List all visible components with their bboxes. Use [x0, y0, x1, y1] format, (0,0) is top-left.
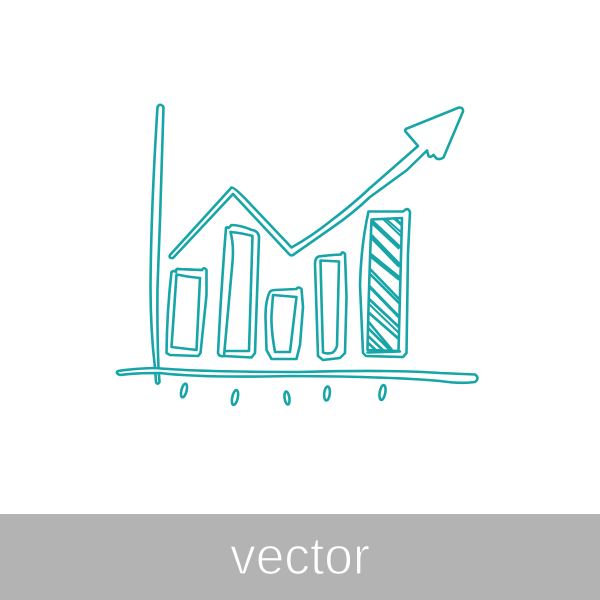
- bar 5 outline: [360, 209, 410, 357]
- footer label: vector: [230, 527, 370, 586]
- bar 3: [266, 288, 303, 359]
- bar 4: [315, 252, 346, 360]
- horizontal axis: [117, 368, 478, 383]
- rising arrow line: [170, 108, 463, 258]
- chart icon: hand-drawn bar chart with rising arrow: [117, 105, 478, 405]
- bar 1: [166, 268, 206, 356]
- bar 2: [218, 225, 259, 358]
- tick marks: [180, 383, 387, 405]
- bar 5 diagonal hatching: [368, 220, 401, 350]
- vertical axis: [150, 105, 164, 384]
- footer band: [0, 514, 600, 600]
